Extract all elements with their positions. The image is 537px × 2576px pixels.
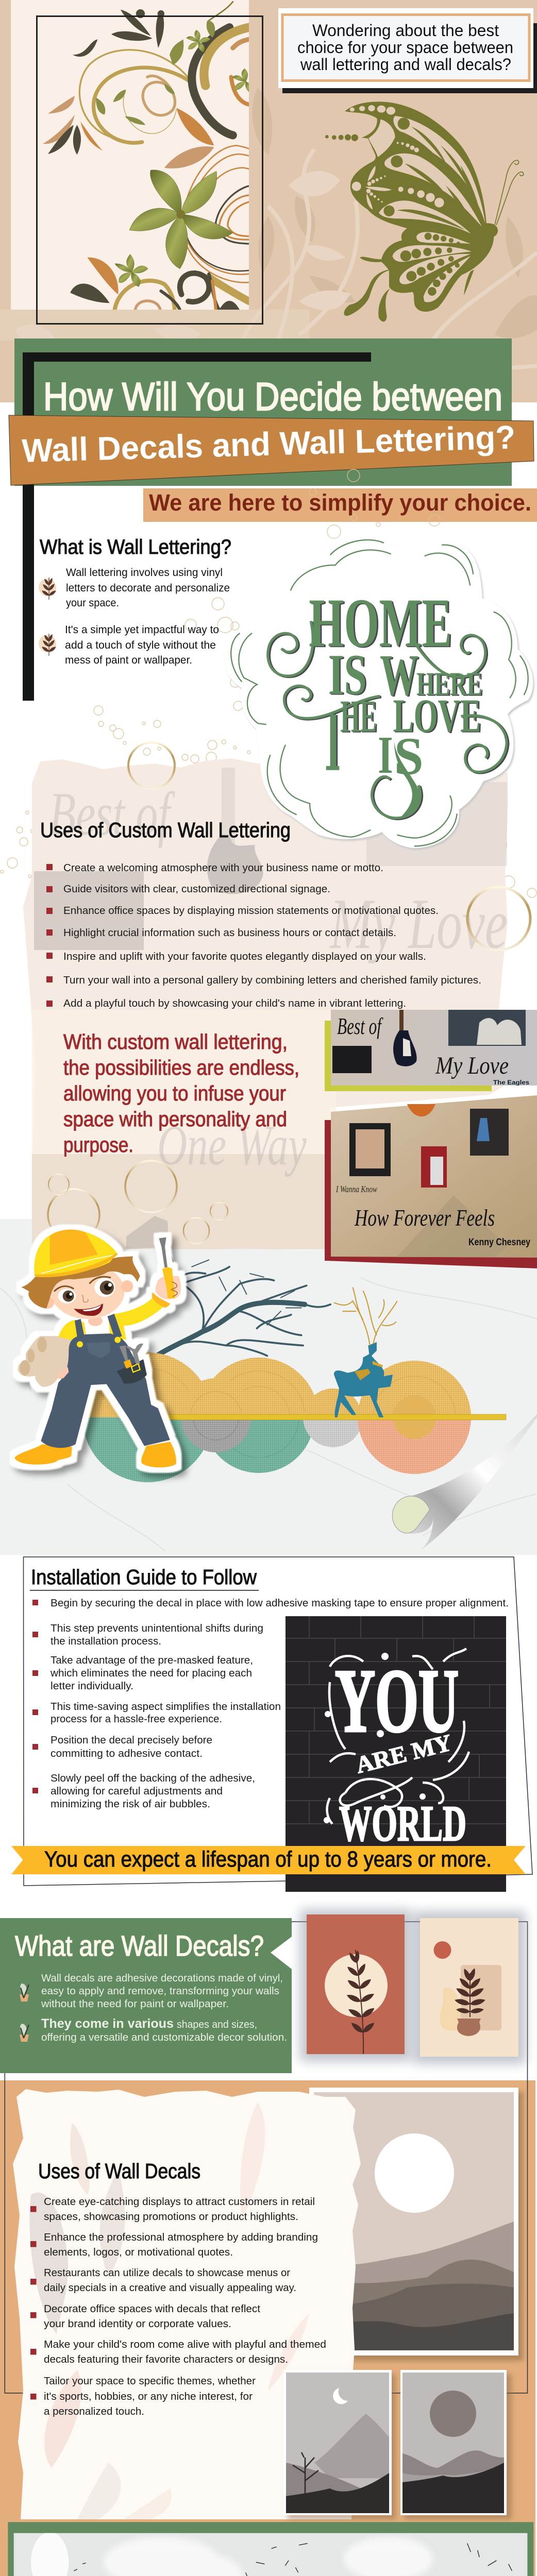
lettering shadow: HE [342,692,378,742]
ghost wall photo [34,768,508,1249]
list: Slowly peel off the backing of the adhesive, [51,1773,255,1784]
green cloud outlines [231,540,528,846]
body text: shapes and sizes, [177,2019,257,2030]
list: Enhance the professional atmosphere by adding branding [44,2231,318,2243]
ghost wall photo: Best of [49,779,175,848]
illustration: gold tree landscape [8,2522,533,2576]
panel: cream floral art [11,0,249,310]
orange title banner [9,415,534,485]
panel: orange uses of wall decals [0,2080,535,2576]
artwork: woven discs, tree and deer [82,1257,537,1555]
text: wall lettering definition [66,567,230,609]
black L accent [23,352,371,701]
callout: wondering question: Wondering about the best [312,21,499,40]
decorative swirls [78,23,249,310]
discs bottom [82,1352,471,1482]
subtitle band: We are here to simplify your choice. [149,489,531,516]
tree branches [137,1257,330,1373]
list: the installation process. [51,1636,161,1647]
body text: easy to apply and remove, transforming your walls [41,1985,279,1997]
callout: wondering question: choice for your space between [297,38,513,57]
list: Create eye-catching displays to attract customers in retail [44,2196,315,2208]
poster: you are my world: YOU [335,1651,459,1751]
callout: wondering question: wall lettering and wall decals? [300,55,511,74]
black picture frame [37,16,263,324]
list: process for a hassle-free experience. [51,1714,222,1725]
photo: best of my love wall [325,1010,537,1091]
heading: uses of custom wall lettering: Uses of Custom Wall Lettering [40,818,291,842]
body text [41,1972,283,2010]
icon: plant bullet 1 [20,1984,29,2002]
list [32,1598,509,1810]
text: simple yet impactful [65,624,219,666]
list: Begin by securing the decal in place with low adhesive masking tape to ensure proper alignment. [51,1598,509,1609]
list: decals featuring their favorite characters or designs. [44,2353,288,2365]
flower [129,170,233,269]
photo: best of my love wall: Best of [337,1013,383,1039]
list: uses of custom wall lettering: Enhance office spaces by displaying mission statements or motivational quotes. [63,905,439,917]
poster: you are my world: ARE MY [353,1729,455,1778]
panel: marble background [0,1219,537,1555]
lettering: I [378,725,393,785]
lettering shadow: LOVE [394,690,482,743]
body text: without the need for paint or wallpaper. [41,1998,229,2010]
list: daily specials in a creative and visually appealing way. [44,2282,296,2294]
icon: plant bullet 2 [20,2024,29,2042]
lettering: HOME [309,585,452,662]
callout: with custom wall lettering: With custom wall lettering, [63,1030,288,1054]
poster: you are my world: WORLD [339,1796,466,1852]
list: Position the decal precisely before [51,1735,212,1746]
list: uses of custom wall lettering: Create a welcoming atmosphere with your business name or motto. [63,862,383,874]
photo: how forever feels wall: I Wanna Know [335,1184,377,1194]
list: Take advantage of the pre-masked feature, [51,1655,253,1666]
lettering shadow: HOME [310,585,454,663]
heading: Installation Guide to Follow [31,1565,257,1589]
photo: how forever feels wall [325,1095,537,1268]
poster: terracotta plant [300,1909,411,2061]
lettering: LOVE [393,690,481,742]
list: minimizing the risk of air bubbles. [51,1799,210,1810]
list: uses of custom wall lettering [46,862,481,1009]
ribbon: lifespan: You can expect a lifespan of up to 8 years or more. [44,1847,492,1872]
list: letter individually. [51,1681,133,1692]
photo: full moon mountain [400,2370,512,2519]
illustration: cartoon worker [14,1230,181,1467]
list: uses of custom wall lettering: Turn your wall into a personal gallery by combining letters and cherished family pictures. [63,974,481,986]
body text: offering a versatile and customizable decor solution. [41,2031,287,2043]
list: elements, logos, or motivational quotes. [44,2246,233,2258]
frame line around decals section [5,1922,528,2393]
lettering: HERE [416,666,482,703]
list: Restaurants can utilize decals to showcase menus or [44,2267,290,2279]
list: Make your child's room come alive with playful and themed [44,2338,326,2350]
gold shelf [153,1414,506,1420]
icon: leaf bullet 2 [39,634,57,656]
heading: What are Wall Decals? [15,1929,264,1962]
panel: what are wall decals [0,1918,292,2073]
lettering: S [394,726,424,786]
lettering: W [380,642,418,708]
list: a personalized touch. [44,2405,144,2417]
photo: how forever feels wall: How Forever Feels [354,1205,495,1231]
lettering: IS [328,643,366,707]
list: uses of custom wall lettering: Guide visitors with clear, customized directional signage. [63,883,330,895]
deer [334,1287,397,1417]
list: Tailor your space to specific themes, whether [44,2375,256,2387]
text: simple yet impactful: It's a simple yet impactful way to [65,624,219,636]
lettering shadow: W [381,643,420,709]
poster: you are my world [286,1616,506,1892]
callout: with custom wall lettering: purpose. [63,1133,133,1157]
panel: installation guide [24,1557,532,1886]
list: allowing for careful adjustments and [51,1786,223,1797]
title line 2: Wall Decals and Wall Lettering? [21,418,516,469]
list: it's sports, hobbies, or any niche interest, for [44,2391,253,2402]
list: This step prevents unintentional shifts during [51,1623,263,1634]
text: wall lettering definition: Wall lettering involves using vinyl [66,567,223,579]
text: wall lettering definition: your space. [66,597,119,609]
panel: hero tan background [0,0,537,402]
heading: what is wall lettering: What is Wall Lettering? [40,536,231,558]
lettering shadow: HERE [418,667,484,704]
callout: with custom wall lettering: the possibilities are endless, [63,1056,299,1079]
decorative bubbles [1,469,536,912]
photo: best of my love wall: The Eagles [493,1079,529,1086]
ghost wall photo: One Way [157,1114,307,1177]
list: Decorate office spaces with decals that reflect [44,2303,260,2315]
poster: cream plant [413,1911,526,2064]
body text [41,2016,287,2043]
sticker: home is where the love is [225,540,534,850]
callout: with custom wall lettering: allowing you to infuse your [63,1081,286,1105]
text: wall lettering definition: letters to decorate and personalize [66,582,230,594]
list: spaces, showcasing promotions or product highlights. [44,2211,298,2223]
callout: wondering question [278,8,537,93]
lettering: HE [340,691,377,742]
list: committing to adhesive contact. [51,1748,203,1759]
discs top [82,1352,471,1482]
list: your brand identity or corporate values. [44,2318,231,2330]
list: uses of custom wall lettering: Inspire and uplift with your favorite quotes elegantly displayed on your walls. [63,951,426,962]
photo: crescent moon mountain [283,2370,396,2519]
leaves [80,108,214,294]
panel: torn paper with watercolor leaves [13,2089,361,2519]
body text: Wall decals are adhesive decorations made of vinyl, [41,1972,283,1984]
list: uses of custom wall lettering: Add a playful touch by showcasing your child's name in vibrant lettering. [63,997,406,1009]
panel: title block [9,338,534,701]
callout: with custom wall lettering [63,1030,299,1157]
list: which eliminates the need for placing each [50,1668,252,1679]
lettering shadow: IS [329,644,368,708]
photo: large mountain frame [309,2088,523,2361]
lettering [268,585,507,818]
list: This time-saving aspect simplifies the installation [51,1701,281,1713]
heading: Uses of Wall Decals [38,2159,200,2183]
body text: They come in various [41,2016,174,2031]
text: simple yet impactful: add a touch of style without the [65,639,216,651]
photo: best of my love wall: My Love [435,1052,509,1079]
rings [48,742,530,1244]
text: simple yet impactful: mess of paint or wallpaper. [65,654,192,666]
icon: butterfly [325,101,524,321]
callout: with custom wall lettering: space with personality and [63,1107,287,1131]
page curl [392,1414,537,1555]
list: uses of custom wall lettering: Highlight crucial information such as business hours or contact details. [63,927,396,939]
lettering shadow [269,585,508,819]
list [30,2196,326,2417]
icon: leaf bullet 1 [39,578,57,600]
panel: torn paper for uses of custom wall lettering [23,758,510,1249]
